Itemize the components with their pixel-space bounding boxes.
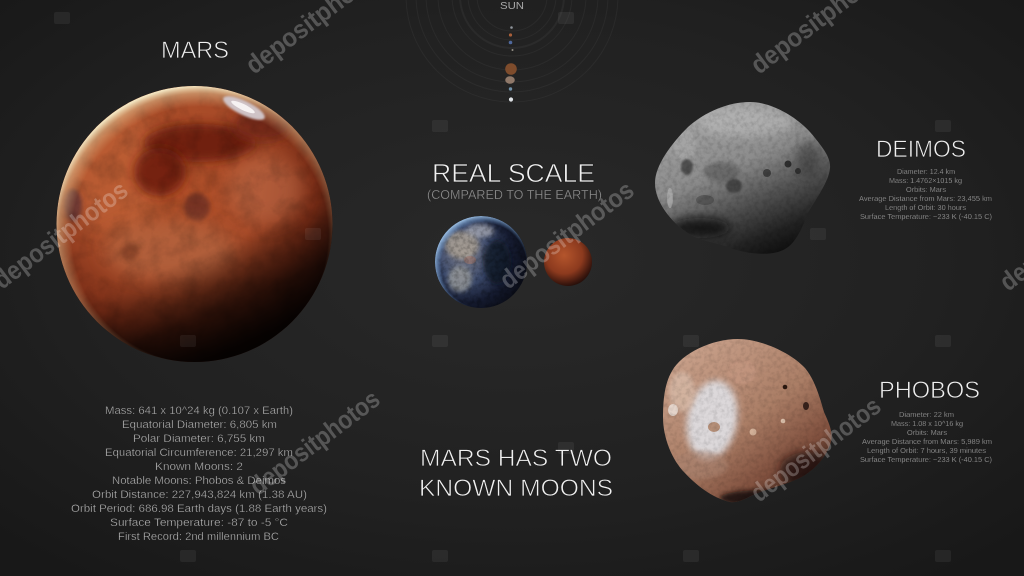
text block: Deimos facts: Mass: 1.4762×1015 kg	[889, 178, 962, 185]
text block: Phobos facts: Average Distance from Mars: 5,989 km	[862, 439, 992, 446]
watermarks: depositphotos	[494, 175, 639, 295]
watermarks: depositphotos	[745, 391, 886, 508]
heading: Mars has two known moons	[419, 445, 613, 502]
label: sun: SUN	[500, 1, 524, 12]
planet: Mars	[56, 86, 334, 362]
text block: Deimos facts: Diameter: 12.4 km	[897, 169, 955, 176]
planet: Earth	[435, 216, 527, 308]
text block: Mars facts: Orbit Distance: 227,943,824 km (1.38 AU)	[92, 489, 307, 501]
text block: Deimos facts: Length of Orbit: 30 hours	[885, 205, 967, 212]
text block: Mars facts: Orbit Period: 686.98 Earth days (1.88 Earth years)	[71, 503, 327, 515]
text block: Mars facts: First Record: 2nd millennium BC	[118, 531, 279, 543]
text block: Phobos facts	[860, 412, 992, 464]
subheading: compared to the earth: (COMPARED TO THE EARTH)	[427, 188, 602, 202]
text block: Mars facts: Polar Diameter: 6,755 km	[133, 433, 265, 445]
text block: Mars facts: Surface Temperature: -87 to -5 °C	[110, 517, 288, 529]
text block: Deimos facts: Orbits: Mars	[906, 187, 947, 194]
diagram: solar system rings and planets	[406, 0, 618, 102]
heading: real scale: REAL SCALE	[432, 158, 595, 188]
heading: Mars: MARS	[161, 37, 229, 64]
text block: Deimos facts	[859, 169, 992, 221]
heading: Deimos: DEIMOS	[876, 136, 966, 163]
heading: Mars has two known moons: MARS HAS TWO	[420, 445, 612, 472]
heading: Mars has two known moons: KNOWN MOONS	[419, 475, 613, 502]
text block: Phobos facts: Orbits: Mars	[907, 430, 948, 437]
text block: Phobos facts: Surface Temperature: ~233 K (-40.15 C)	[860, 457, 992, 464]
text block: Deimos facts: Surface Temperature: ~233 K (-40.15 C)	[860, 214, 992, 221]
text block: Mars facts: Known Moons: 2	[155, 461, 243, 473]
planet: small Mars	[544, 238, 592, 286]
text block: Deimos facts: Average Distance from Mars: 23,455 km	[859, 196, 992, 203]
moon: Deimos	[655, 102, 830, 254]
text block: Mars facts	[71, 405, 327, 543]
watermarks: depositphotos	[244, 384, 385, 501]
text block: Mars facts: Equatorial Circumference: 21,297 km	[105, 447, 293, 459]
heading: Phobos: PHOBOS	[879, 377, 980, 404]
text block: Phobos facts: Length of Orbit: 7 hours, 39 minutes	[867, 448, 987, 455]
text block: Phobos facts: Diameter: 22 km	[899, 412, 954, 419]
text block: Phobos facts: Mass: 1.08 x 10^16 kg	[891, 421, 963, 428]
moon: Phobos	[660, 335, 836, 506]
text block: Mars facts: Mass: 641 x 10^24 kg (0.107 x Earth)	[105, 405, 293, 417]
text block: Mars facts: Equatorial Diameter: 6,805 km	[122, 419, 277, 431]
text block: Mars facts: Notable Moons: Phobos & Deimos	[112, 475, 287, 487]
